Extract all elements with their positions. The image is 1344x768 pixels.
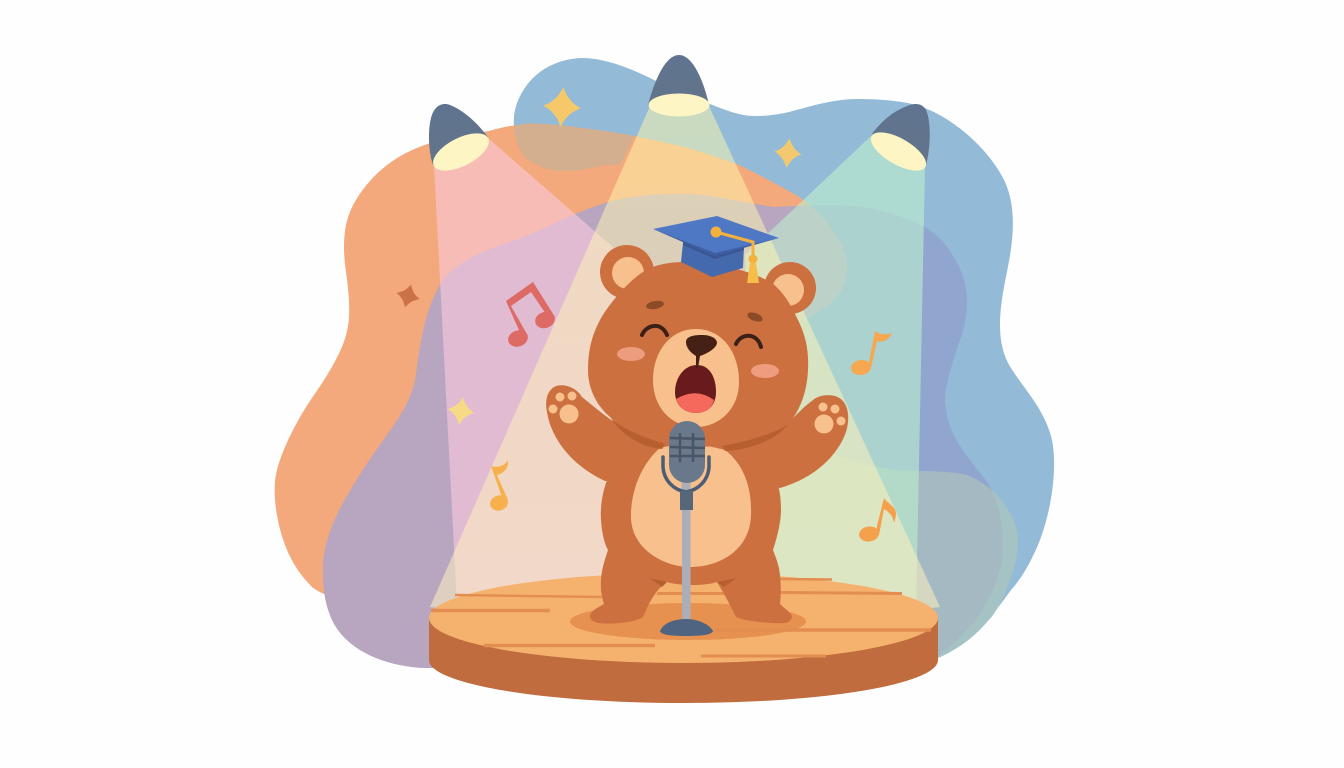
neck shadow (611, 419, 788, 451)
spotlight beam: right teal (745, 136, 925, 612)
spotlight lamp: left (427, 104, 495, 178)
right brow (746, 311, 764, 323)
mic cradle (663, 457, 709, 492)
blob overlap: blue over orange (514, 124, 634, 171)
tassel knot (748, 254, 758, 264)
left ear (600, 245, 654, 299)
background blob: purple over blue (323, 194, 1003, 668)
background blob: purple over orange (323, 194, 847, 668)
muzzle (653, 329, 739, 427)
graduation cap (653, 216, 779, 283)
music note: orange right upper (850, 331, 892, 376)
head (588, 262, 808, 447)
mic head (669, 421, 705, 483)
left brow (645, 299, 665, 311)
cap button (710, 226, 722, 238)
cap band shadow (683, 240, 744, 259)
mic neck (680, 491, 693, 510)
sparkle: brown left (393, 281, 423, 311)
spotlight lamp: right (865, 104, 932, 178)
music note: orange left (488, 460, 510, 513)
right eye (736, 336, 761, 347)
sparkle: gold top right (773, 137, 803, 169)
microphone (660, 421, 713, 636)
music note: red double note (506, 282, 557, 349)
background blob: orange (275, 124, 847, 620)
platform top (429, 573, 938, 663)
background blob: blue (514, 58, 1054, 657)
cap board (653, 216, 779, 253)
mouth (675, 365, 716, 413)
mic base (660, 619, 713, 636)
left eye (642, 326, 667, 335)
platform wood grain (431, 579, 931, 656)
nose (686, 335, 717, 368)
tassel cord (716, 232, 753, 258)
right arm (750, 395, 848, 488)
bear body and legs (590, 440, 792, 624)
music note: orange right lower (858, 498, 896, 543)
spotlight lamp: centre (648, 55, 710, 116)
leg shadows (649, 578, 736, 587)
mic stand pole (682, 510, 690, 622)
bear character (546, 245, 848, 624)
tassel (747, 263, 759, 283)
left arm (546, 385, 640, 481)
spotlight beam: centre yellow (430, 106, 940, 640)
background blob: teal (770, 430, 1018, 658)
sparkle: pale yellow left (446, 395, 476, 427)
left cheek (617, 347, 645, 361)
illustration: singing graduate bear on a spotlit stage (274, 55, 1054, 703)
tongue (676, 393, 714, 413)
left paw pads (548, 392, 578, 424)
platform shadow (570, 603, 806, 640)
spotlight beam: left pink (434, 138, 640, 605)
belly (631, 444, 751, 567)
right ear (764, 262, 816, 314)
stage platform (429, 573, 938, 703)
sparkle: gold top left (542, 86, 582, 128)
cap board edge (653, 229, 779, 256)
right cheek (751, 364, 779, 378)
cap base (681, 243, 744, 277)
right paw pads (814, 402, 846, 434)
background blob: teal base (900, 475, 1018, 658)
mic connector (682, 482, 690, 492)
mic grille (670, 433, 705, 462)
platform side (429, 618, 938, 703)
